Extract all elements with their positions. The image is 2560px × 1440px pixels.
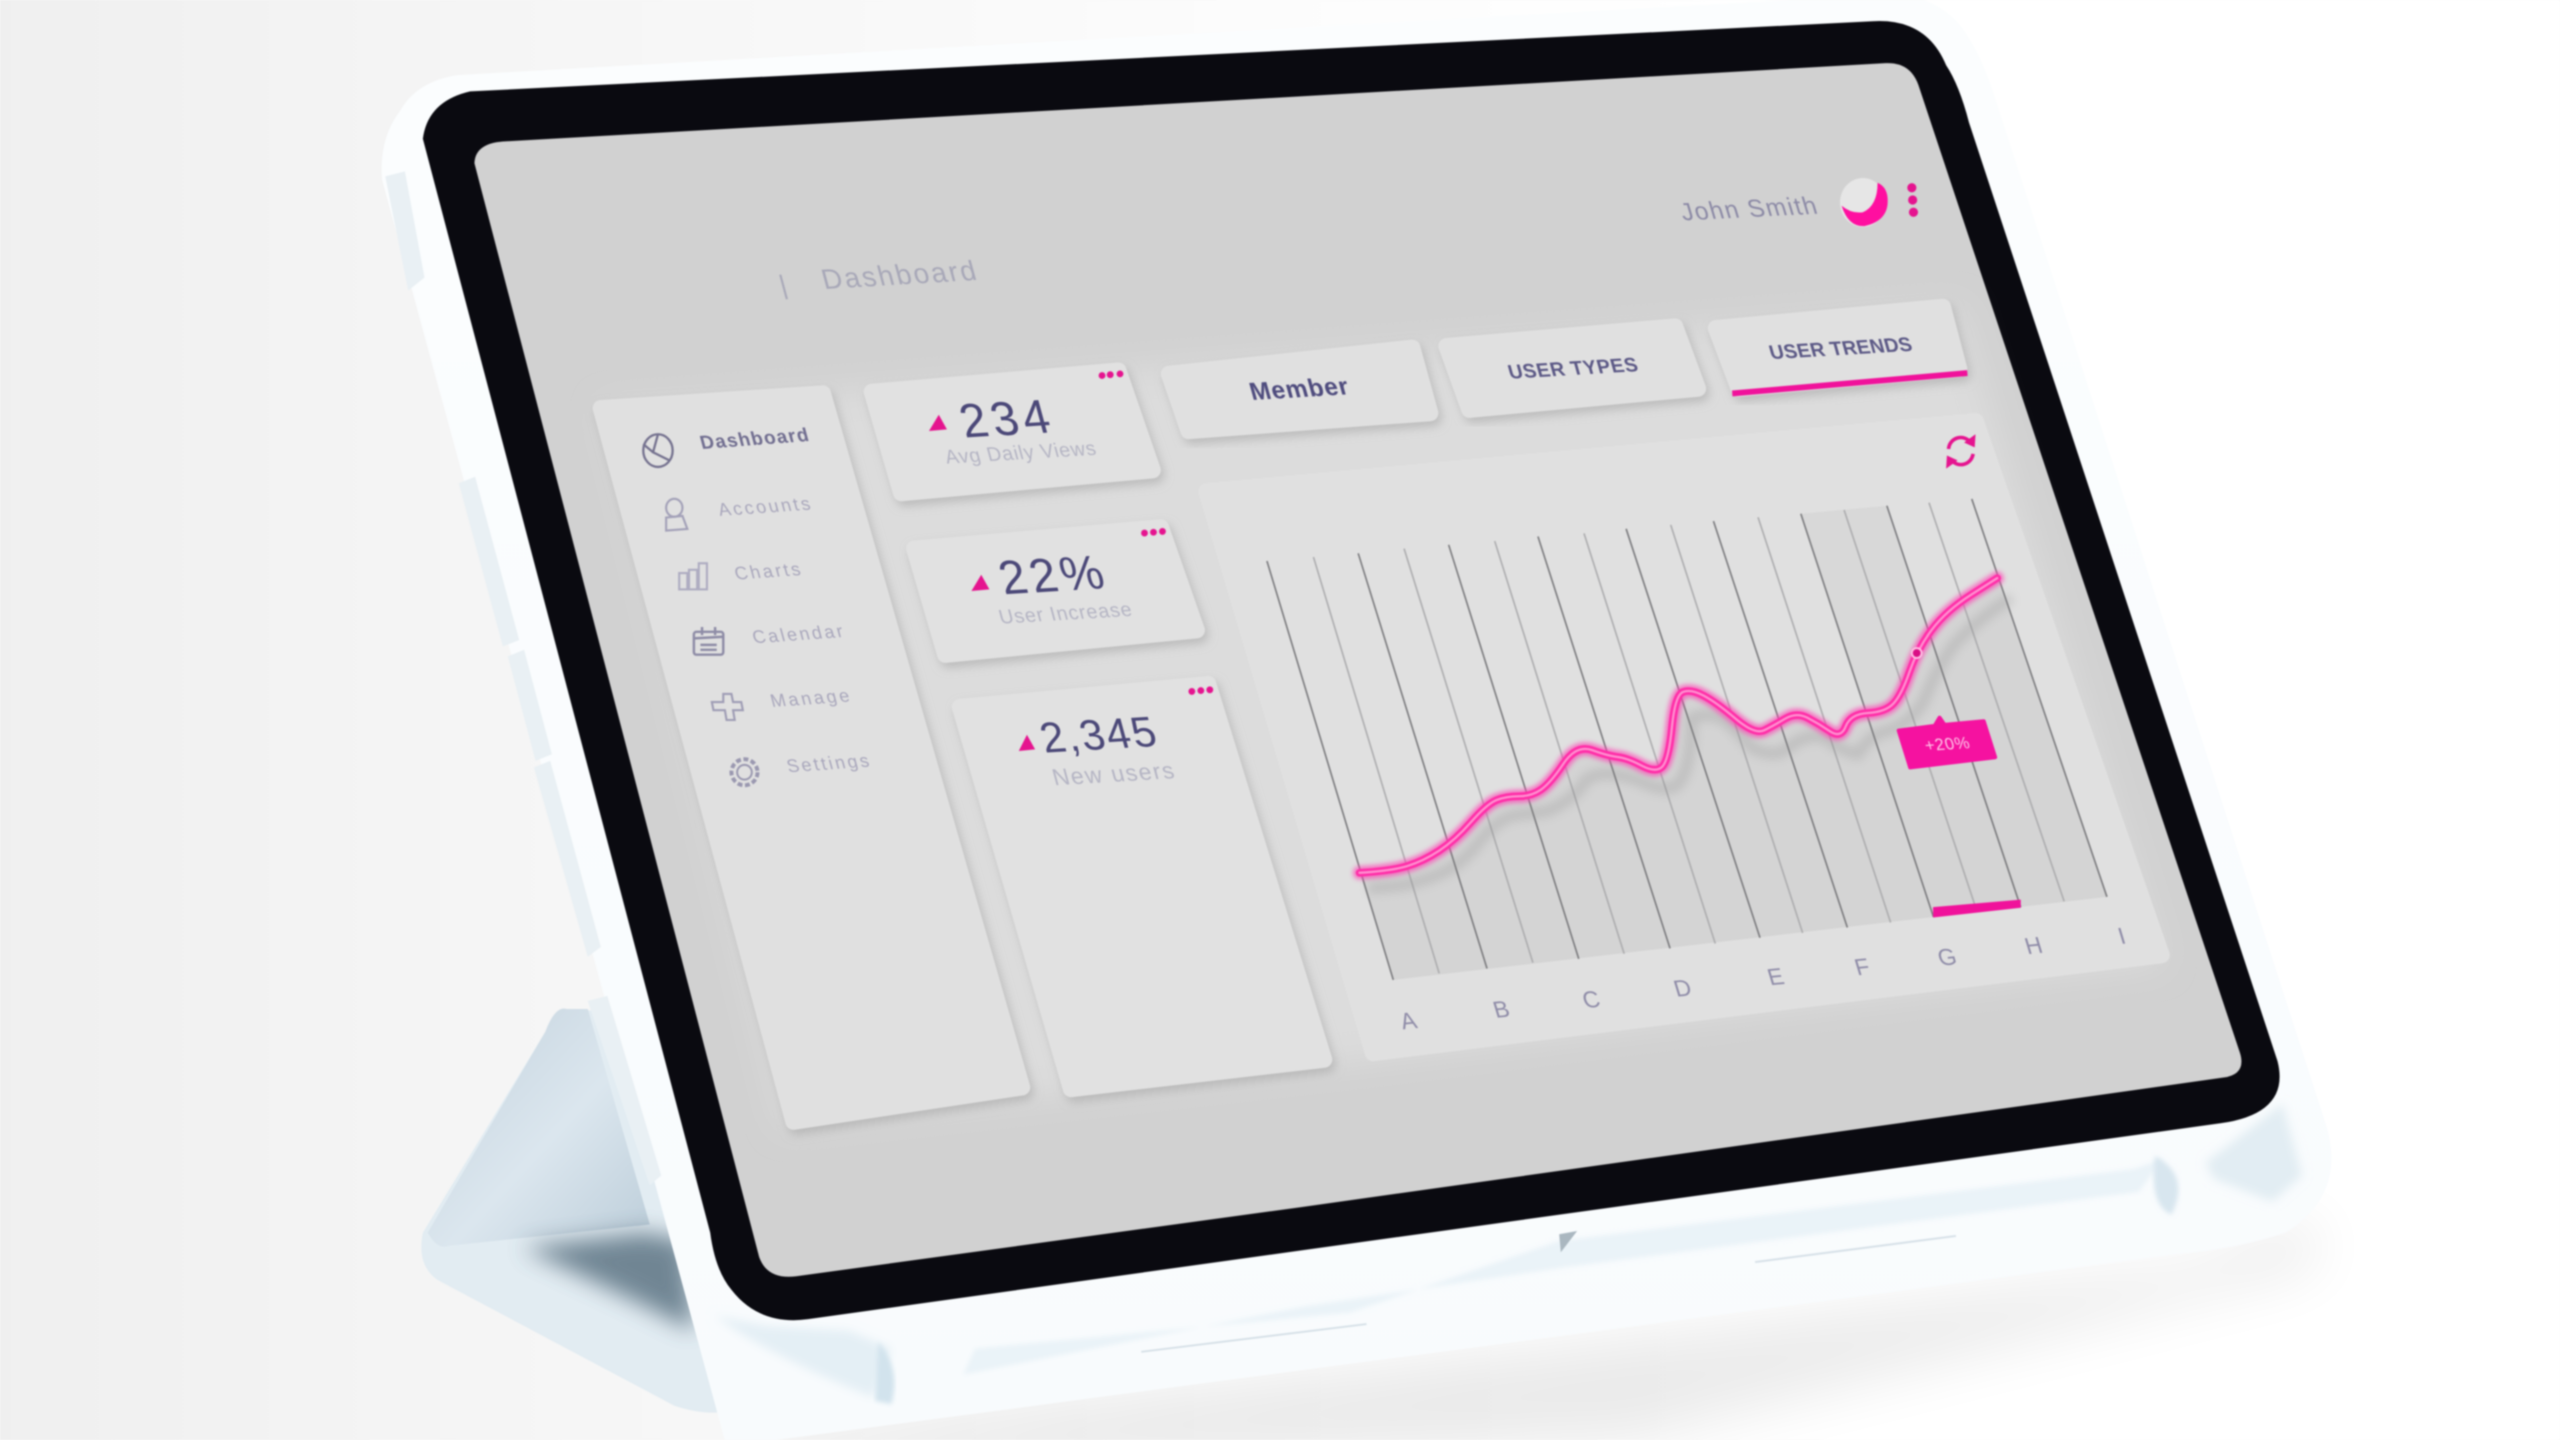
card: avg daily views bbox=[872, 370, 1153, 493]
nav item: charts: Charts bbox=[732, 558, 803, 584]
callout: +20%: +20% bbox=[1922, 733, 1972, 755]
up triangle bbox=[1019, 735, 1035, 751]
trend curve bbox=[1360, 578, 1997, 873]
header: avatar bbox=[1840, 178, 1888, 227]
card dots bbox=[1141, 528, 1166, 536]
x axis labels: B bbox=[1490, 996, 1513, 1023]
case side buttons bbox=[385, 171, 661, 1185]
card: user increase bbox=[914, 527, 1197, 655]
soft glow behind panels bbox=[604, 307, 2163, 1127]
card dots bbox=[1099, 370, 1123, 379]
header: user name: John Smith bbox=[1677, 192, 1821, 226]
highlighted bar G bbox=[1933, 900, 2021, 918]
tab: user types bbox=[1447, 327, 1698, 410]
active underline bbox=[1732, 373, 1967, 393]
caption: User Increase bbox=[996, 599, 1134, 629]
caption: New users bbox=[1049, 757, 1177, 790]
tab: user trends active bbox=[1716, 307, 1967, 393]
header: breadcrumb title: Dashboard bbox=[818, 254, 980, 295]
nav item: accounts: Accounts bbox=[715, 493, 812, 520]
caption: Avg Daily Views bbox=[942, 438, 1098, 469]
x axis labels bbox=[1397, 923, 2129, 1034]
x axis labels: C bbox=[1579, 986, 1603, 1013]
nav item: calendar: Calendar bbox=[750, 620, 845, 647]
icon: dashboard pie bbox=[643, 434, 673, 467]
nav item: manage: Manage bbox=[768, 685, 852, 711]
folded stand cover bbox=[422, 1008, 717, 1413]
screen bbox=[474, 63, 2241, 1277]
icon: refresh bbox=[1946, 434, 1976, 469]
value: 2,345 bbox=[1035, 709, 1162, 762]
tablet case bbox=[382, 0, 2331, 1440]
pencil holder details bbox=[715, 1104, 2302, 1404]
card: new users bbox=[960, 684, 1324, 1089]
x axis labels: G bbox=[1934, 944, 1960, 971]
chart grid lines bbox=[1267, 499, 2107, 980]
case ground shadow bbox=[727, 1216, 2318, 1440]
icon: calendar bbox=[694, 627, 723, 655]
black bezel bbox=[423, 21, 2280, 1320]
tab: user types: USER TYPES bbox=[1506, 354, 1641, 384]
curve drop shadow bbox=[1368, 598, 2011, 888]
x axis labels: E bbox=[1764, 963, 1787, 990]
header: breadcrumb title: | bbox=[776, 270, 790, 300]
nav item: dashboard: Dashboard bbox=[698, 425, 811, 454]
x axis labels: I bbox=[2115, 923, 2129, 949]
card dots bbox=[1188, 686, 1213, 695]
highlighted column G bbox=[1801, 506, 2021, 917]
icon: settings gear bbox=[731, 759, 758, 785]
tab: user trends active: USER TRENDS bbox=[1767, 334, 1915, 364]
value: 22% bbox=[993, 546, 1110, 605]
panel: sidebar bbox=[601, 393, 1022, 1122]
x axis labels: A bbox=[1397, 1007, 1420, 1034]
up triangle bbox=[971, 575, 989, 591]
area under the curve bbox=[1360, 578, 2107, 980]
up triangle bbox=[929, 415, 947, 431]
icon: accounts bbox=[666, 499, 687, 531]
icon: charts bbox=[679, 563, 707, 589]
x axis labels: D bbox=[1671, 975, 1695, 1002]
icon: manage bbox=[712, 694, 743, 720]
callout: +20% bbox=[1899, 718, 1995, 767]
curve marker bbox=[1912, 648, 1922, 658]
tab: member bbox=[1169, 348, 1430, 431]
x axis labels: F bbox=[1851, 954, 1873, 980]
nav item: settings: Settings bbox=[784, 750, 871, 776]
value: 234 bbox=[954, 390, 1056, 448]
panel: trend chart bbox=[1207, 421, 2162, 1053]
tab: member: Member bbox=[1246, 373, 1352, 406]
x axis labels: H bbox=[2022, 932, 2046, 959]
header: menu dots bbox=[1907, 183, 1918, 217]
